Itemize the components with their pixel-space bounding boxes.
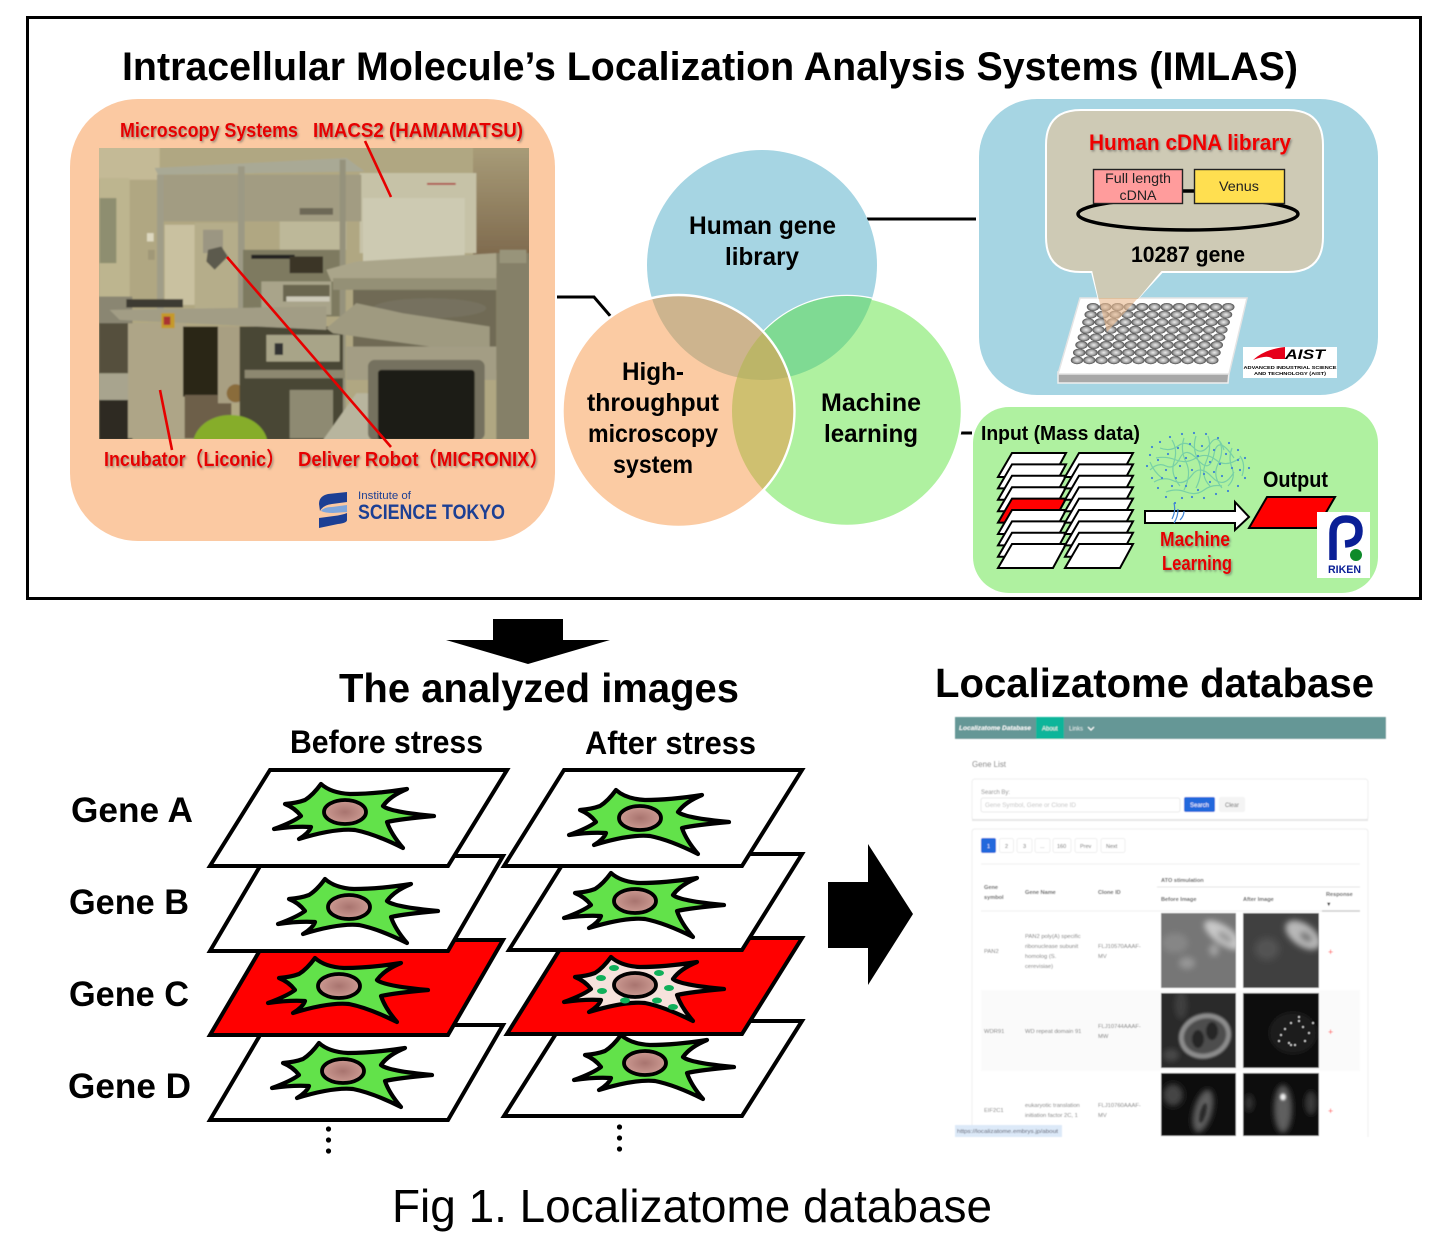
arrow: machine learning: [1145, 502, 1249, 530]
row: EIF2C1: MV: [1098, 1113, 1107, 1119]
row: WDR91: WD repeat domain 91: [1025, 1029, 1081, 1035]
image stack: before stress: [210, 770, 507, 1120]
label: incubator: Incubator（Liconic）: [104, 448, 284, 471]
logo: AIST: ADVANCED INDUSTRIAL SCIENCE: [1244, 365, 1337, 371]
row: PAN2: cerevisiae): [1025, 964, 1053, 970]
row: EIF2C1: +: [1328, 1106, 1333, 1116]
construct link: [1182, 189, 1194, 193]
nav bar: Localizatome Database: [959, 725, 1032, 732]
column label: after stress: After stress: [585, 725, 756, 761]
gene count: 10287 gene: [1131, 242, 1245, 267]
table header: After Image: [1243, 897, 1274, 903]
arrow: right to database: [828, 844, 913, 985]
table header: ▼: [1326, 902, 1332, 908]
connector: gene library to venn: [867, 218, 976, 220]
table header: ATO stimulation: [1161, 878, 1204, 884]
pagination: 3: [1023, 844, 1026, 850]
table header: Clone ID: [1098, 890, 1121, 896]
output sheet: [1249, 497, 1335, 528]
panel: machine learning: [973, 407, 1378, 593]
venn label: machine learning: Machine: [821, 389, 921, 417]
logo: AIST: AND TECHNOLOGY (AIST): [1254, 371, 1326, 377]
pointer lines: [160, 141, 391, 450]
row: WDR91: +: [1328, 1027, 1333, 1037]
venn label: machine learning: [821, 389, 921, 448]
status bar: [955, 1125, 1062, 1137]
table header: Gene Name: [1025, 890, 1056, 896]
row: PAN2: ribonuclease subunit: [1025, 944, 1079, 950]
ellipsis: after column: [617, 1124, 622, 1152]
gap cover between boxes: [1183, 194, 1194, 204]
label: machine learning: Learning: [1162, 553, 1232, 575]
search card: [972, 779, 1368, 821]
logo: AIST: [1243, 346, 1337, 378]
image stack: after stress: [504, 770, 802, 1116]
box: full length cDNA: Full length: [1105, 170, 1171, 186]
logo: RIKEN: [1317, 512, 1370, 578]
pagination: [981, 838, 1125, 853]
heading: the analyzed images: The analyzed images: [339, 665, 739, 711]
photo: microscope equipment: [99, 148, 529, 439]
row: EIF2C1: eukaryotic translation: [1025, 1103, 1080, 1109]
search card: Gene Symbol, Gene or Clone ID: [985, 803, 1077, 809]
pagination: 160: [1057, 844, 1066, 850]
logo: Institute of Science Tokyo: [319, 490, 505, 528]
logo: Institute of Science Tokyo: Institute of: [358, 490, 412, 502]
nav bar: [955, 717, 1386, 739]
label: microscopy systems: Microscopy Systems: [120, 120, 298, 142]
label: IMACS2: IMACS2 (HAMAMATSU): [313, 120, 523, 142]
venn diagram: [562, 150, 962, 527]
row: EIF2C1: initiation factor 2C, 1: [1025, 1113, 1078, 1119]
row: WDR91: [984, 1024, 1333, 1040]
nav bar: About: [1042, 726, 1058, 732]
logo: RIKEN: RIKEN: [1328, 564, 1361, 576]
pagination: 2: [1005, 844, 1008, 850]
row: WDR91: WDR91: [984, 1029, 1004, 1035]
ellipsis: before column: [326, 1126, 331, 1154]
heading: gene list: Gene List: [972, 760, 1007, 769]
micrograph: EIF2C1 after: [1242, 1072, 1320, 1136]
micrograph: EIF2C1 before: [1160, 1072, 1236, 1136]
venn label: machine learning: learning: [824, 420, 918, 448]
box: full length cDNA: cDNA: [1120, 187, 1157, 203]
stressed cell with granules: [564, 957, 724, 1021]
table header: [981, 864, 1360, 911]
label: input: Input (Mass data): [981, 423, 1140, 445]
panel: IMLAS frame: [28, 18, 1420, 598]
connector: microscopy to venn: [557, 297, 612, 318]
search card: Search By:: [981, 790, 1010, 796]
venn label: high-throughput microscopy system: system: [613, 451, 693, 479]
label: deliver robot: Deliver Robot（MICRONIX）: [298, 448, 548, 471]
row: PAN2: [984, 934, 1333, 970]
screenshot: localizatome database: [955, 717, 1387, 1137]
pagination: Next: [1106, 844, 1118, 850]
venn label: human gene library: Human gene: [689, 212, 836, 240]
row label: gene D: Gene D: [68, 1067, 191, 1106]
venn label: high-throughput microscopy system: microscopy: [588, 420, 718, 448]
row label: gene B: Gene B: [69, 883, 189, 922]
logo: Institute of Science Tokyo: SCIENCE TOKYO: [358, 501, 505, 524]
label: machine learning: Machine: [1160, 529, 1230, 551]
nav bar: Links: [1069, 726, 1083, 732]
table row 2 background: [981, 990, 1360, 1071]
table header: Before Image: [1161, 897, 1196, 903]
search card: Clear: [1225, 803, 1239, 809]
panel: microscopy systems: [70, 99, 555, 541]
table header: Response: [1326, 892, 1353, 898]
callout heading: Human cDNA library: [1089, 130, 1292, 155]
venn label: human gene library: library: [725, 243, 799, 271]
input stack: right: [1065, 453, 1133, 568]
status bar: https://localizatome.embrys.jp/about: [957, 1129, 1059, 1135]
venn label: human gene library: [689, 212, 836, 271]
table card: [972, 829, 1368, 1137]
row: PAN2: MV: [1098, 954, 1107, 960]
row: EIF2C1: EIF2C1: [984, 1108, 1004, 1114]
row: PAN2: FLJ10570AAAF-: [1098, 944, 1141, 950]
row: PAN2: +: [1328, 947, 1333, 957]
row label: gene A: Gene A: [71, 791, 193, 830]
box: Venus: [1194, 170, 1284, 204]
micrograph: PAN2 after: [1242, 912, 1320, 988]
table header: symbol: [984, 895, 1004, 901]
label: output: Output: [1263, 467, 1329, 492]
venn label: high-throughput microscopy system: High-: [622, 358, 684, 386]
micrograph: PAN2 before: [1160, 912, 1236, 988]
row: EIF2C1: FLJ10760AAAF-: [1098, 1103, 1141, 1109]
row: PAN2: homolog (S.: [1025, 954, 1057, 960]
column label: before stress: Before stress: [290, 724, 483, 760]
pagination: Prev: [1080, 844, 1092, 850]
panel: human cDNA library: [979, 99, 1378, 395]
plasmid ring: [1078, 198, 1298, 230]
pagination: 1: [987, 844, 990, 850]
pagination: ...: [1040, 844, 1045, 850]
brain stem: [1172, 503, 1184, 523]
heading: localizatome database: Localizatome database: [935, 660, 1374, 706]
input stack: left: [998, 453, 1066, 568]
icon: neural brain: [1147, 433, 1249, 503]
box: full length cDNA: [1094, 170, 1182, 204]
label: machine learning: [1160, 529, 1232, 575]
venn label: high-throughput microscopy system: throughput: [587, 389, 720, 417]
connector: machine learning to venn: [958, 432, 972, 434]
row: PAN2: PAN2 poly(A) specific: [1025, 934, 1081, 940]
micrograph: WDR91 before: [1160, 992, 1236, 1068]
search card: Search: [1190, 803, 1209, 809]
row label: gene C: Gene C: [69, 975, 189, 1014]
well plate: [1058, 298, 1247, 383]
box: Venus: Venus: [1219, 178, 1259, 194]
row: EIF2C1: [984, 1103, 1333, 1119]
table header: Gene: [984, 885, 998, 891]
logo: AIST: AIST: [1284, 346, 1327, 362]
venn label: high-throughput microscopy system: [587, 358, 720, 479]
arrow: down: [446, 619, 610, 664]
row: PAN2: PAN2: [984, 949, 999, 955]
micrograph: WDR91 after: [1242, 992, 1320, 1068]
row: WDR91: FLJ10744AAAF-: [1098, 1024, 1141, 1030]
callout: cDNA construct: [1046, 110, 1323, 332]
row: WDR91: MW: [1098, 1034, 1109, 1040]
title: Intracellular Molecule’s Localization Analysis Systems (IMLAS): [122, 45, 1298, 89]
caption: Fig 1. Localizatome database: [392, 1180, 992, 1232]
